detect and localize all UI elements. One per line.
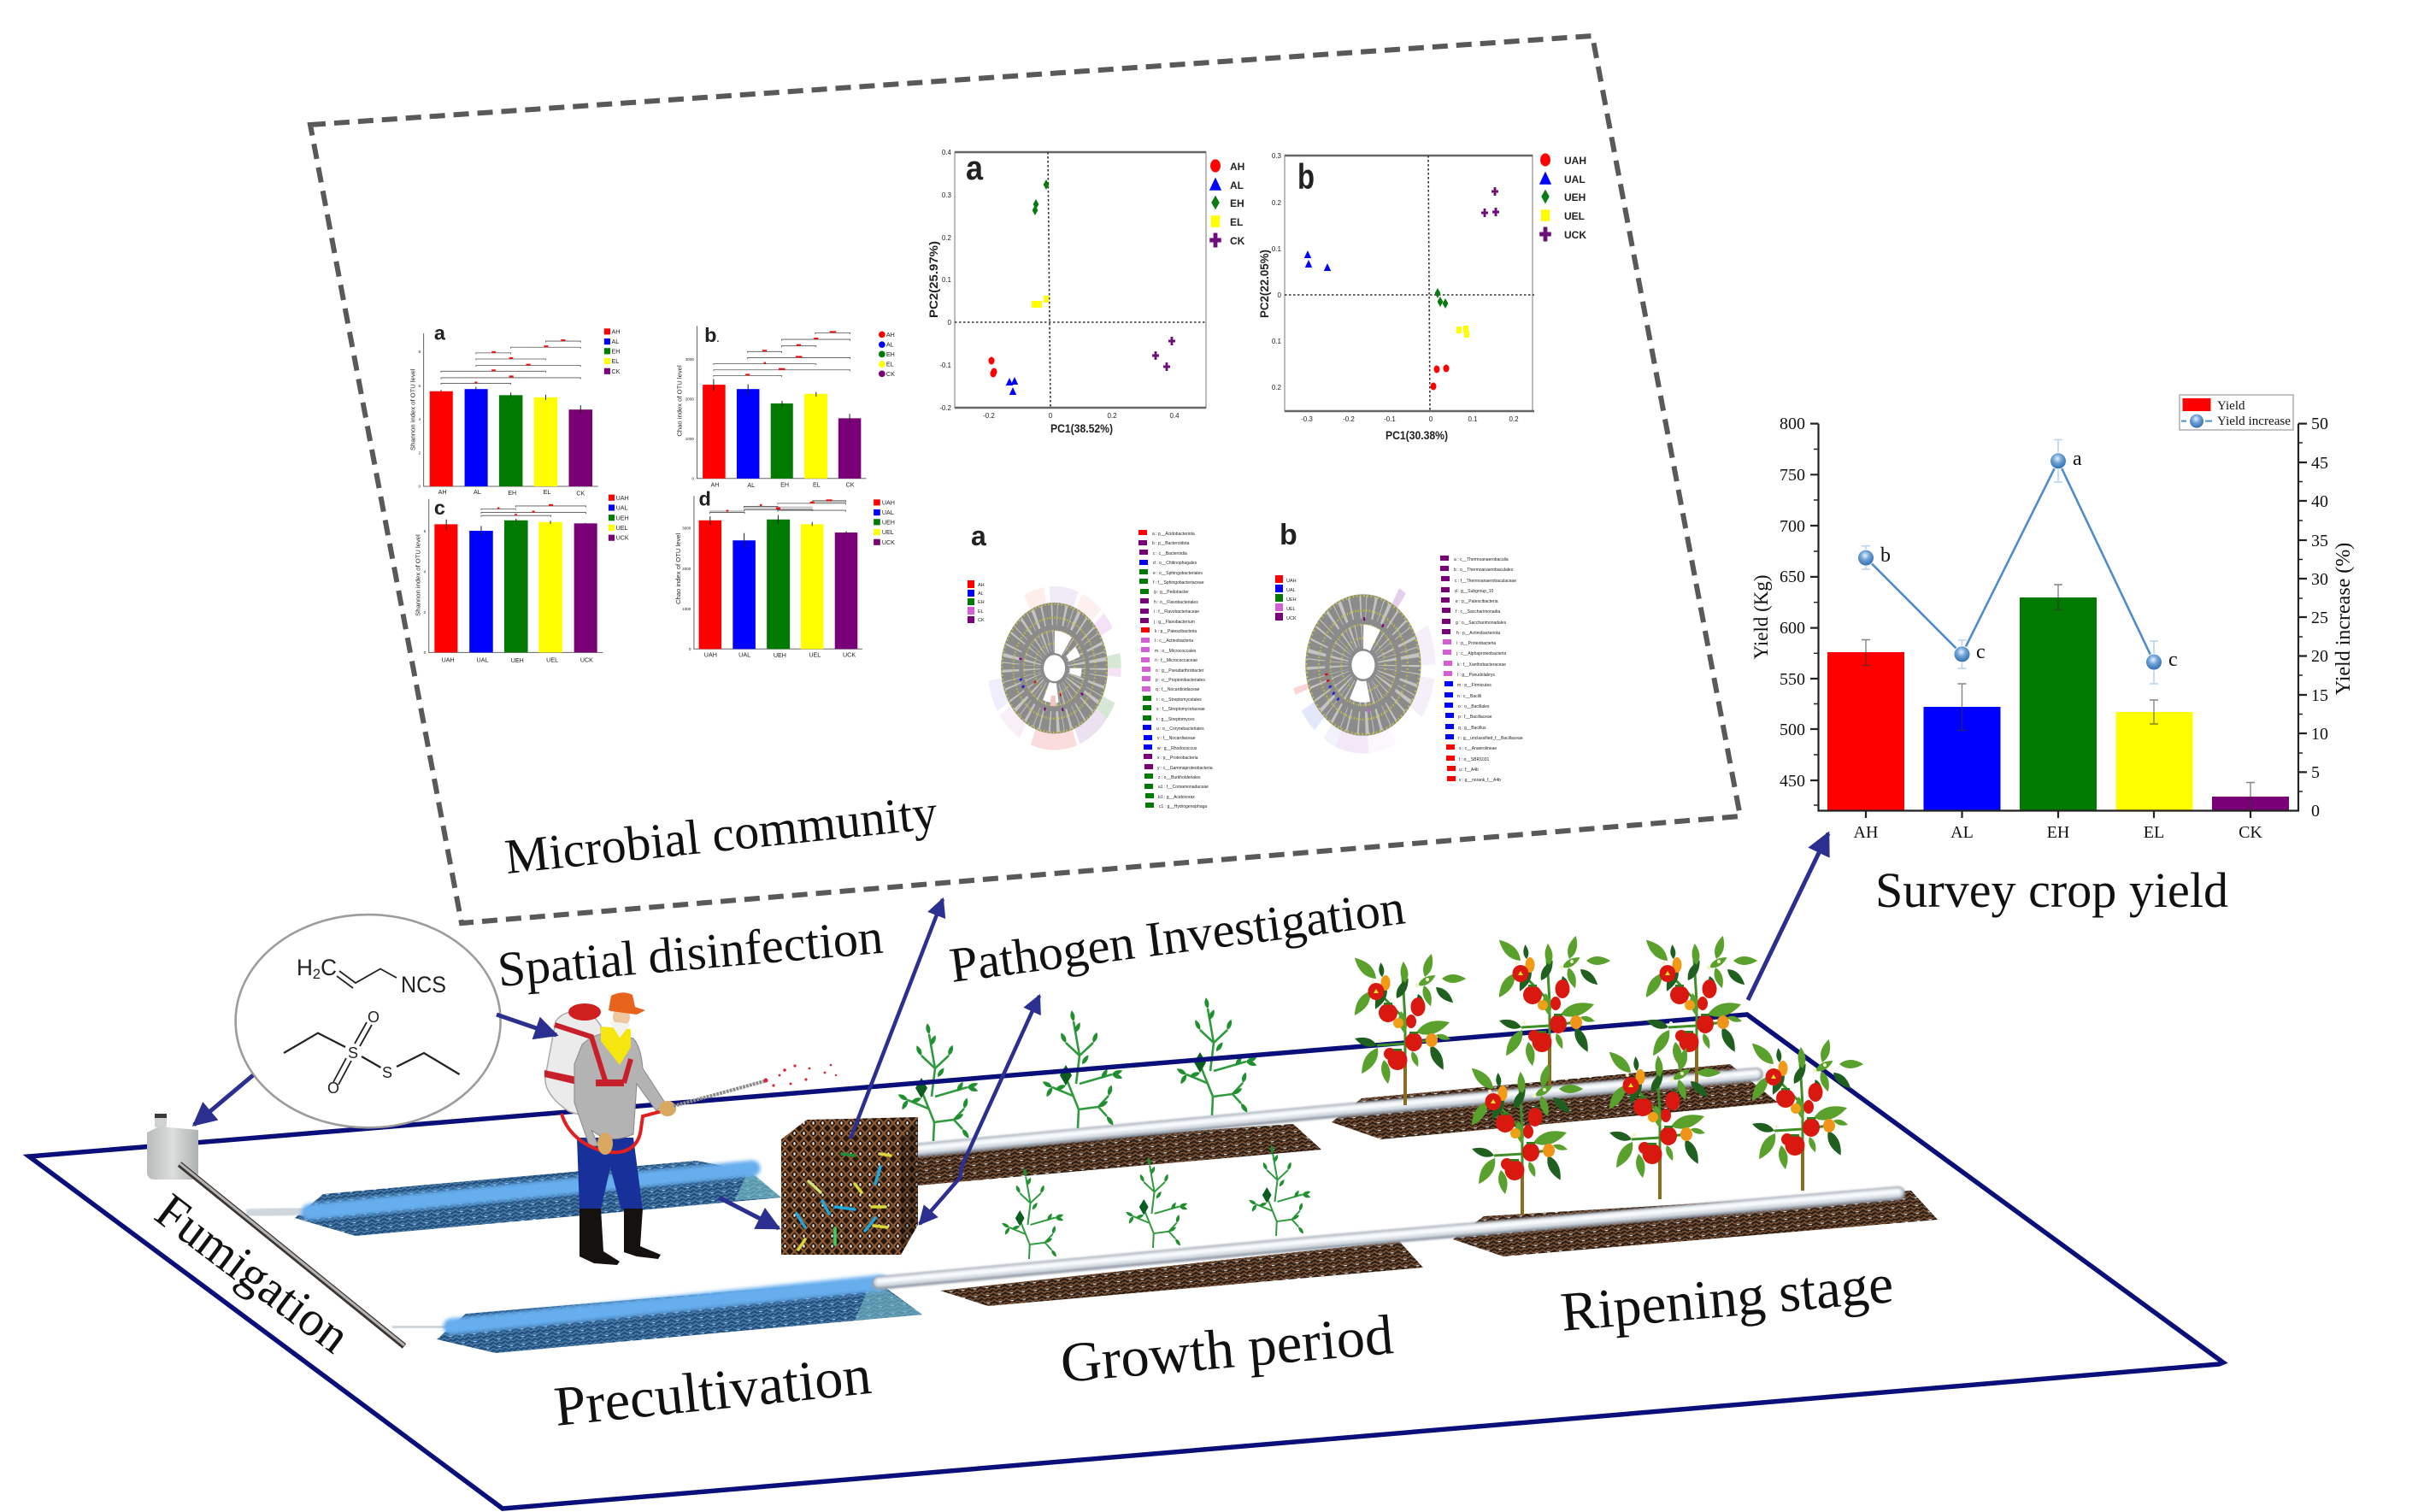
bar chart a: Shannon index: 8 [418,350,421,354]
legend: AH [1230,161,1244,173]
taxa legend: t : o__SBR1031 [1459,757,1490,762]
taxa legend: f : f__Sphingobacteriaceae [1153,580,1204,585]
taxa legend: m : o__Micrococcales [1155,649,1197,654]
legend: UEL [1564,210,1585,222]
bar chart d: Chao index: d [699,487,711,509]
right axis labels: 20 [2311,647,2328,666]
heading: Precultivation: Precultivation [551,1344,874,1438]
taxa legend: j : c__Alphaproteobacteria [1456,651,1506,656]
taxa legend: y : c__Gammaproteobacteria [1157,766,1213,771]
group legend [968,580,985,623]
seedlings: front row of growth period [1001,1145,1311,1259]
diethyl thiosulfonate structure: S [382,1064,392,1081]
right axis labels: 25 [2311,609,2328,627]
icon: worker with backpack sprayer [544,992,837,1265]
bar chart c: Shannon index: UEH [511,657,524,664]
taxa legend: w : g__Rhodococcus [1157,746,1197,751]
x axis labels: AL [1950,823,1974,842]
bar chart d: Chao index: UAL [882,509,894,516]
bar chart d: Chao index: UAL [738,651,750,658]
taxa legend: p : f__Bacillaceae [1458,715,1492,720]
scatter plot b: PCoA: 0 [1278,291,1282,299]
diethyl thiosulfonate structure [284,1009,460,1097]
bar chart b: Chao index [676,324,895,489]
seedlings: back row of growth period [897,997,1257,1141]
scatter plot a: PCoA: -0.2 [939,404,952,412]
taxa legend: v : g__norank_f__A4b [1459,778,1501,783]
heading: Fumigation: Fumigation [145,1182,361,1363]
right axis title: Yield increase (%) [2333,543,2355,695]
scatter plot a: PCoA [927,149,1245,435]
taxa legend: h : p__Actinobacteriota [1456,631,1500,636]
cladogram b: LEfSe [1275,519,1523,783]
group: alpha diversity bar charts [409,322,895,664]
significance letters: a [2073,448,2082,470]
scatter plot b: PCoA: 0.2 [1272,199,1282,207]
left axis labels: 550 [1780,670,1805,689]
bar chart c: Shannon index: c [434,497,445,519]
taxa legend: l : c__Actinobacteria [1155,638,1193,644]
taxa legend: q : f__Nocardioidaceae [1156,687,1200,692]
left axis labels: 800 [1780,415,1805,433]
bar chart b: Chao index: CK [886,371,895,378]
bar chart a: Shannon index: 4 [418,417,421,421]
bar chart c: Shannon index: 4 [424,570,427,574]
group legend: AL [978,591,984,597]
bar chart d: Chao index: 2000 [682,567,691,571]
highlight sectors and ring [1298,585,1428,744]
bar chart d: Chao index: 0 [689,647,691,651]
legend: Yield [2217,399,2245,413]
bar chart b: Chao index: Chao index of OTU level [676,365,684,437]
taxa legend: e : p__Patescibacteria [1456,599,1498,604]
cladogram b: LEfSe: b [1280,519,1297,551]
blue fumigated bed: back row [246,1161,781,1236]
bar chart d: Chao index: UEL [882,529,894,536]
bar chart a: Shannon index: AH [438,489,447,496]
bar chart d: Chao index: 1000 [682,607,691,611]
scatter plot a: PCoA: PC1(38.52%) [1050,421,1113,435]
taxa legend: m : p__Firmicutes [1457,683,1491,688]
heading: Survey crop yield: Survey crop yield [1875,862,2228,918]
group legend: AH [978,583,985,588]
legend [2180,395,2293,430]
bar chart b: Chao index: EL [886,362,894,368]
allyl isothiocyanate structure [297,955,446,997]
scatter plot b: PCoA: 0.1 [1468,415,1478,423]
hose [562,1108,675,1152]
arrow: soil cube to microbial community [850,899,943,1138]
scatter plot a: PCoA: 0.1 [942,276,952,284]
taxa legend: o : g__Pseudarthrobacter [1156,668,1204,674]
bar chart d: Chao index: UEH [774,652,786,659]
taxa legend: r : g__unclassified_f__Bacillaceae [1458,736,1523,741]
bar chart b: Chao index: CK [846,481,855,488]
bar chart b: Chao index: AH [710,481,719,488]
taxa legend: c : c__Bacteroidia [1153,551,1187,556]
icon: soil sample cube [781,1117,918,1255]
bar chart d: Chao index: UCK [843,651,856,658]
taxa legend: d : g__Subgroup_10 [1455,589,1494,594]
cladogram a: LEfSe [968,521,1213,809]
bar chart b: Chao index: EH [780,481,789,488]
group legend: UAH [1286,579,1297,584]
group legend: EL [978,609,984,615]
bar chart b: Chao index: 2000 [685,397,694,401]
taxa legend: g : o__Saccharimonadales [1456,621,1507,626]
x axis labels: EH [2047,823,2069,842]
bar chart a: Shannon index [409,322,621,497]
diethyl thiosulfonate structure: O [327,1080,339,1097]
scatter plot b: PCoA [1257,152,1586,442]
left axis labels: 500 [1780,721,1805,739]
bar chart b: Chao index: 3000 [685,357,694,362]
taxa legend [1138,530,1213,809]
taxa legend: o : o__Bacillales [1458,704,1490,709]
taxa legend: h : o__Flavobacteriales [1154,600,1198,605]
bar chart c: Shannon index: UEH [616,515,629,521]
hands [597,1133,613,1155]
drip pipe: front row [879,1191,1898,1283]
bar chart d: Chao index: UAH [882,499,895,506]
bar chart c: Shannon index: UAH [442,657,455,664]
taxa legend: u : f__A4b [1459,768,1479,773]
arrow: field to crop yield chart [1748,833,1828,1000]
scatter plot b: PCoA: 0.2 [1272,384,1282,391]
scatter plot b: PCoA: 0.3 [1272,152,1282,160]
significance letters: b [1880,544,1891,567]
boots [580,1209,661,1265]
soil bed: ripening back row [1332,1064,1778,1139]
spray lance [674,1080,768,1106]
highlight sectors and ring [995,595,1115,742]
legend [1209,159,1245,248]
taxa legend: b1 : g__Acidovorax [1158,795,1195,800]
taxa legend: u : o__Corynebacteriales [1156,727,1204,732]
blue fumigated bed: front row [392,1280,922,1353]
bar error bars [1862,585,2255,810]
legend: EH [1230,197,1244,209]
scatter plot b: PCoA: 0.1 [1272,245,1282,253]
taxa legend: i : p__Proteobacteria [1456,641,1496,646]
arrow: blue bed to soil cube [719,1197,779,1228]
significance letters: c [1976,641,1986,663]
group legend: UCK [1286,616,1297,621]
bar chart a: Shannon index: 0 [418,485,421,489]
taxa legend: f : c__Saccharimonadia [1456,609,1500,615]
bar chart c: Shannon index: UAL [616,505,628,512]
legend: AL [1230,179,1244,191]
bar chart a: Shannon index: CK [612,368,621,375]
bar chart c: Shannon index: Shannon index of OTU level [415,534,422,616]
bar chart c: Shannon index [415,495,629,664]
left axis labels: 650 [1780,568,1805,586]
taxa legend: g : g__Pedobacter [1154,590,1189,595]
taxa legend: n : f__Micrococcaceae [1155,658,1197,663]
taxa legend: a : c__Thermoanaerobaculia [1454,557,1509,562]
right axis labels: 40 [2311,492,2328,511]
bar chart a: Shannon index: EH [508,490,516,497]
allyl isothiocyanate structure: C [321,955,337,980]
tomato plants: back row of ripening stage [1350,935,1757,1105]
bar chart a: Shannon index: AL [474,489,481,496]
right axis labels: 35 [2311,532,2328,550]
allyl isothiocyanate structure: H [297,955,313,980]
taxa legend: s : f__Streptomycetaceae [1156,707,1205,712]
bar chart c: Shannon index: 0 [424,650,427,655]
bar chart c: Shannon index: UAL [477,657,488,664]
head [613,1008,630,1027]
spray droplets [764,1064,837,1087]
right axis labels: 10 [2311,725,2328,744]
arrow: structures to sprayer [497,1015,556,1035]
bar chart b: Chao index: b. [704,324,720,346]
bar chart c: Shannon index: UEL [546,657,558,664]
bar chart c: Shannon index: UAH [616,495,629,502]
soil bed: growth period front row [940,1241,1423,1306]
bar chart d: Chao index: 3000 [682,526,691,530]
trousers [577,1138,643,1209]
taxa legend: j : g__Flavobacterium [1153,620,1195,625]
bar chart a: Shannon index: EL [612,358,619,365]
taxa legend: p : o__Propionibacteriales [1156,678,1205,683]
bar chart b: Chao index: AH [886,332,895,338]
bar chart a: Shannon index: AL [612,338,619,345]
bar chart c: Shannon index: UEL [616,525,628,532]
bar chart b: Chao index: 1000 [685,437,694,441]
heading: Growth period: Growth period [1058,1303,1396,1395]
legend: Yield increase [2217,415,2291,428]
scatter plot a: PCoA: 0.3 [942,191,952,199]
right axis labels: 50 [2311,415,2328,433]
diethyl thiosulfonate structure: S [348,1044,358,1062]
scatter plot a: PCoA: -0.1 [939,362,952,369]
group legend: UEL [1286,607,1296,612]
panel: field plot with cultivation stages [29,935,2223,1509]
taxa legend: q : g__Bacillus [1458,726,1486,731]
scatter plot a: PCoA: -0.2 [983,412,995,420]
heading: Ripening stage: Ripening stage [1558,1253,1896,1344]
bar chart d: Chao index: UCK [882,539,895,546]
scatter plot b: PCoA: PC2(22.05%) [1257,250,1271,318]
field plot outline [29,1015,2223,1509]
taxa legend: b : o__Thermoanaerobaculales [1454,568,1514,573]
drip pipe: back row [915,1073,1756,1150]
scatter plot b: PCoA: -0.1 [1384,415,1396,423]
bar chart c: Shannon index: UCK [616,535,629,542]
taxa legend: b : p__Bacteroidota [1152,541,1190,546]
scatter plot b: PCoA: 0.1 [1272,338,1282,345]
x axis labels: EL [2144,823,2164,842]
scatter plot b: PCoA: 0 [1429,415,1433,423]
bar chart b: Chao index: EH [886,351,895,358]
bar chart b: Chao index: EL [813,481,821,488]
heading: Spatial disinfection: Spatial disinfection [495,909,885,997]
taxa legend: k : p__Patescibacteria [1155,629,1197,634]
bar chart a: Shannon index: Shannon index of OTU level [409,368,416,450]
scatter plot a: PCoA: 0 [948,319,952,327]
bar chart a: Shannon index: EL [544,489,550,496]
taxa legend: e : o__Sphingobacteriales [1153,571,1203,576]
bar chart c: Shannon index: 2 [424,610,427,615]
bar chart b: Chao index: 0 [691,476,694,480]
group legend: UAL [1286,588,1296,593]
scatter plot b: PCoA: b [1297,156,1315,197]
yield increase line [1857,439,2162,684]
bar chart d: Chao index: Chao index of OTU level [674,532,682,604]
taxa legend: r : o__Streptomycetales [1156,697,1202,703]
bar chart a: Shannon index: EH [612,348,620,355]
taxa legend: x : p__Proteobacteria [1157,756,1198,761]
bar chart b: Chao index: AL [747,482,755,489]
scatter plot b: PCoA: -0.3 [1301,415,1313,423]
x axis labels: AH [1854,823,1878,842]
significance letters [1880,448,2178,671]
yellow scarf [601,1027,631,1065]
taxa legend: i : f__Flavobacteriaceae [1154,609,1199,615]
scatter plot a: PCoA: a [966,150,984,187]
bar chart a: Shannon index: CK [576,491,585,497]
legend: UAL [1564,174,1586,185]
arrow: pathogen investigation double arrow [920,996,1039,1224]
sprayer tank [545,1010,605,1115]
group legend: UEH [1286,597,1297,603]
bar chart a: Shannon index: AH [612,328,620,335]
group legend: CK [978,618,985,623]
scatter plot b: PCoA: PC1(30.38%) [1386,428,1448,442]
right axis labels: 5 [2311,763,2320,782]
axis titles: Yield (Kg) [1750,574,1772,660]
taxa legend: d : o__Chitinophagales [1153,561,1197,566]
taxa legend: t : g__Streptomyces [1156,717,1195,722]
heading: Microbial community: Microbial community [503,784,940,885]
legend: EL [1230,216,1243,228]
coat [574,1033,665,1147]
cladogram a: LEfSe: a [971,521,986,551]
legend: UCK [1564,229,1586,241]
scatter plot a: PCoA: 0.2 [942,234,952,242]
heading: Pathogen Investigation: Pathogen Investigation [946,879,1408,993]
soil bed: ripening front row [1453,1191,1938,1256]
scatter plot a: PCoA: 0 [1049,412,1053,420]
icon: fumigant jug [147,1114,198,1180]
bar chart d: Chao index: UAH [704,651,717,658]
taxa legend: c : f__Thermoanaerobaculaceae [1455,579,1516,584]
shoulder straps [555,1025,631,1083]
panel: crop yield combo chart [1750,395,2355,842]
panel: chemical structures circle [236,915,501,1127]
x axis labels: CK [2239,823,2262,842]
scatter plot a: PCoA: 0.4 [1169,412,1180,420]
bar chart d: Chao index: UEH [882,519,895,526]
bar chart d: Chao index [674,487,895,659]
scatter plot a: PCoA: PC2(25.97%) [927,241,940,318]
x axis labels [1854,823,2262,842]
scatter plot b: PCoA: 0.2 [1509,415,1519,423]
taxa legend: c1 : g__Hydrogenophaga [1159,804,1207,809]
icon: fumigation injection tube [179,1163,404,1346]
significance letters: c [2168,649,2178,671]
axes [1810,424,2307,818]
legend: UEH [1564,191,1586,203]
scatter plot b: PCoA: -0.2 [1343,415,1355,423]
taxa legend: s : c__Anaerolineae [1459,746,1497,751]
taxa legend: n : c__Bacilli [1457,694,1481,699]
right axis labels [2311,415,2328,821]
right axis labels: 30 [2311,570,2328,589]
bar chart a: Shannon index: 6 [418,384,421,388]
taxa legend [1440,556,1523,783]
legend: CK [1230,235,1245,247]
right axis labels: 45 [2311,454,2328,473]
right axis labels: 0 [2311,802,2320,821]
bar chart d: Chao index: UEL [809,651,821,658]
bar chart a: Shannon index: a [434,322,446,344]
soil bed: growth period back row [918,1124,1321,1185]
taxa legend: a : p__Acidobacteriota [1152,532,1195,537]
taxa legend: k : f__Xanthobacteraceae [1457,662,1506,668]
bar chart c: Shannon index: 6 [424,529,427,533]
scatter plot a: PCoA: 0.4 [942,149,952,156]
taxa legend: a1 : f__Comamonadaceae [1158,785,1209,790]
legend [1539,153,1586,241]
left axis labels: 600 [1780,619,1805,638]
group legend [1275,575,1297,621]
left axis labels: 750 [1780,466,1805,485]
taxa legend: z : o__Burkholderiales [1158,775,1201,780]
allyl isothiocyanate structure: 2 [313,966,321,982]
left axis labels: 700 [1780,517,1805,536]
scatter plot a: PCoA: 0.2 [1107,412,1117,420]
group legend: EH [978,600,985,605]
taxa legend: l : g__Pseudolabrys [1457,673,1495,678]
bar chart c: Shannon index: UCK [580,657,593,664]
arrow: structures to fumigant jug [194,1075,253,1125]
legend: UAH [1564,155,1586,167]
left axis labels [1780,415,1805,791]
diethyl thiosulfonate structure: O [368,1009,379,1026]
bar chart b: Chao index: AL [886,342,894,349]
right axis labels: 15 [2311,686,2328,705]
tomato plants: front row of ripening stage [1468,1038,1863,1215]
bar chart a: Shannon index: 2 [418,451,421,456]
taxa legend: v : f__Nocardiaceae [1157,736,1196,741]
left axis labels: 450 [1780,772,1805,791]
allyl isothiocyanate structure: NCS [401,972,446,997]
bars [1827,597,2289,810]
